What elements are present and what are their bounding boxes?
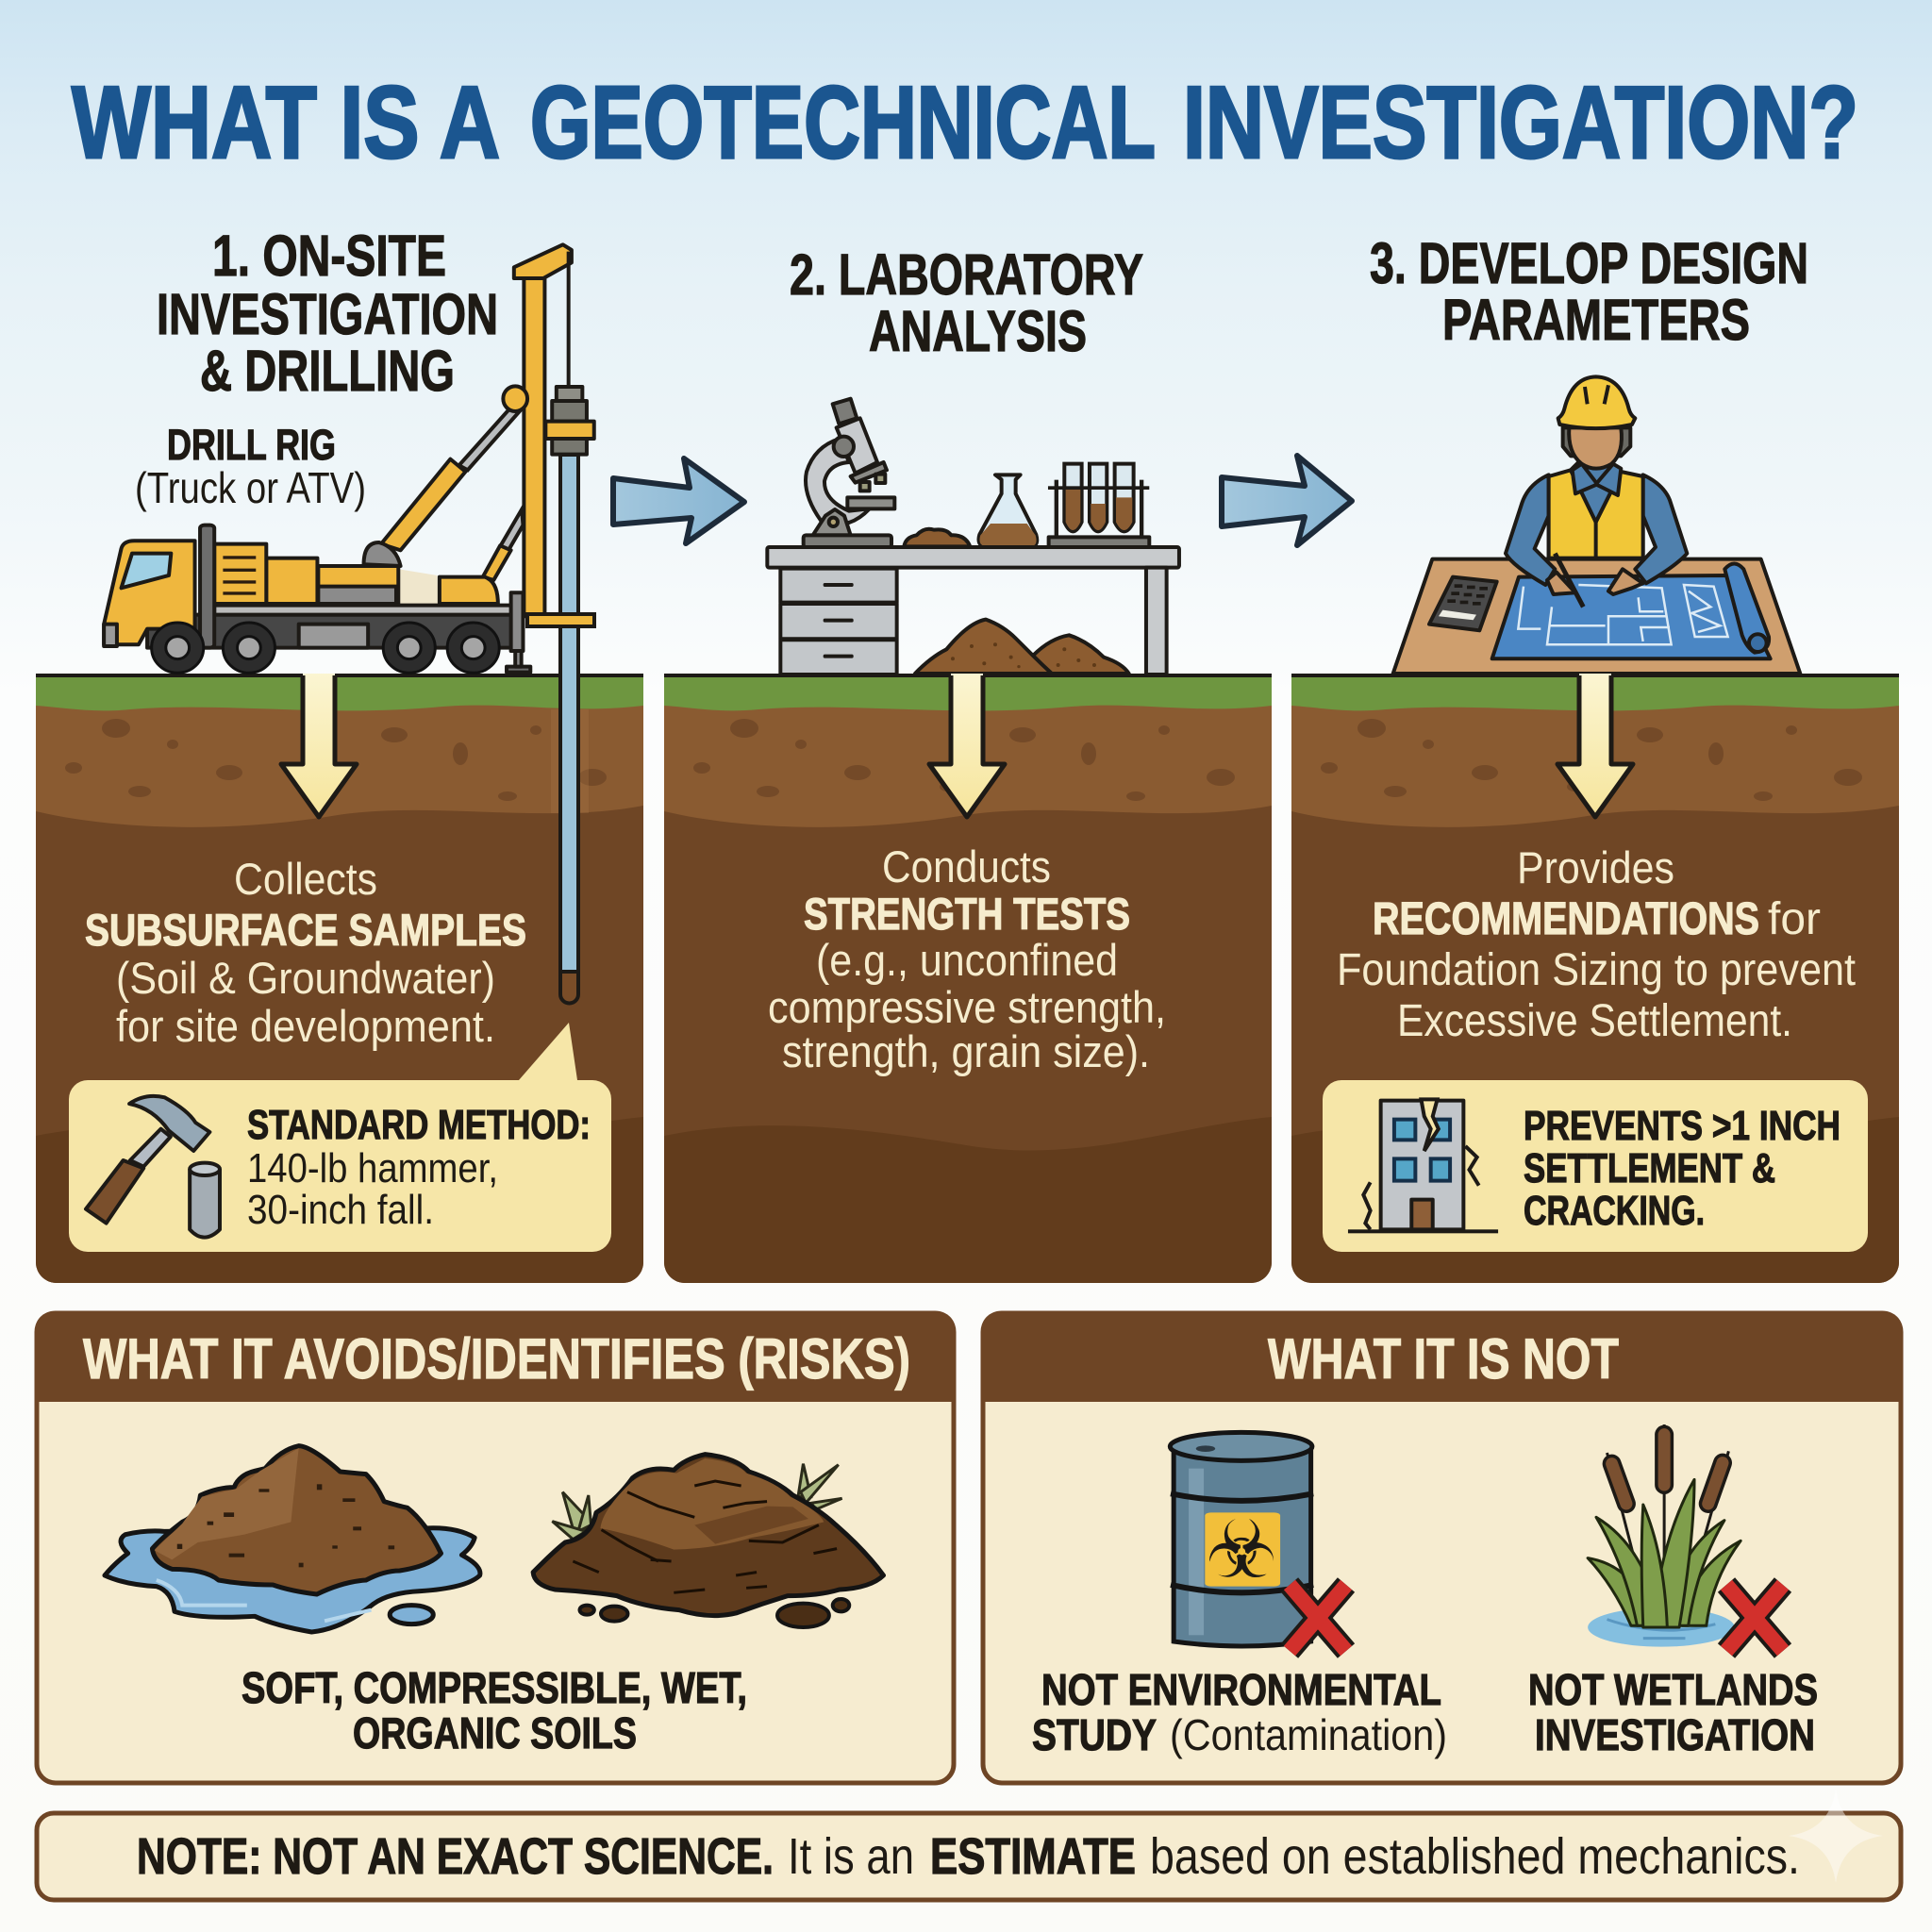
caption: not environmental: (Contamination) [1170,1710,1447,1759]
note bar: NOTE: NOT AN EXACT SCIENCE. [137,1828,774,1885]
panel header: risks [35,1311,956,1402]
icon: red x on barrel [1290,1585,1346,1651]
icon: red x on reeds [1726,1585,1783,1651]
text: step 1 description: (Soil & Groundwater) [116,953,495,1003]
title: GEOTECHNICAL [530,65,1156,180]
title: WHAT IS A [72,65,500,180]
heading: step 1: & DRILLING [200,339,455,403]
arrow: step 1 to step 2 [613,458,744,543]
heading: step 3: 3. DEVELOP DESIGN [1370,231,1808,295]
text: step 2 description: Conducts [882,841,1051,891]
panel: step 3 soil [1291,674,1899,1283]
caption: risks: ORGANIC SOILS [353,1708,637,1757]
caption: not wetlands: INVESTIGATION [1535,1710,1815,1759]
icon: hammer and rod [86,1096,220,1238]
heading: step 3: PARAMETERS [1442,288,1750,352]
text: step 3 description: Foundation Sizing to prevent [1337,945,1856,995]
text: step 1 description: SUBSURFACE SAMPLES [85,905,526,955]
callout: prevents settlement: PREVENTS >1 INCH [1524,1103,1840,1149]
text: step 1 description: Collects [234,854,377,904]
label: drill rig: DRILL RIG [167,421,336,469]
icon: drill rig truck [104,244,594,673]
text: step 3 description: for [1768,894,1821,944]
icon: lab bench with microscope, flask, tubes, soil [767,399,1179,675]
text: step 2 description: compressive strength, [768,982,1166,1032]
caption: not wetlands: NOT WETLANDS [1528,1665,1818,1714]
note bar: ESTIMATE [930,1828,1136,1885]
caption: not environmental [1032,1665,1447,1759]
text: step 1 description: for site development. [116,1001,495,1051]
text: step 2 description: STRENGTH TESTS [804,889,1130,939]
icon: soil piles [105,1446,883,1632]
text: step 2 description [768,841,1166,1076]
callout: standard method [69,1023,611,1252]
watermark sparkle [1789,1789,1883,1883]
panel: what it avoids / identifies [35,1311,956,1783]
note bar: It is an [788,1828,914,1885]
text: step 3 description: Excessive Settlement. [1397,996,1792,1046]
text: step 1 description [85,854,526,1051]
text: step 2 description: (e.g., unconfined [816,935,1118,985]
callout: standard method: 30-inch fall. [247,1187,434,1233]
arrow: step 2 to step 3 [1222,456,1352,545]
callout: prevents settlement [1323,1080,1868,1252]
panel: what it is not [981,1311,1903,1783]
label: drill rig: (Truck or ATV) [135,463,366,512]
callout: prevents settlement: SETTLEMENT & [1524,1145,1775,1191]
arrow: step 3 down [1557,674,1633,817]
text: step 2 description: strength, grain size). [782,1026,1150,1076]
heading: not: WHAT IT IS NOT [1268,1327,1619,1391]
callout: prevents settlement: CRACKING. [1524,1188,1705,1234]
heading: step 2 [790,242,1143,363]
panel: step 1 soil [36,674,643,1283]
heading: step 2: 2. LABORATORY [790,242,1143,307]
note bar: based on established mechanics. [1150,1828,1800,1885]
caption: not environmental: STUDY [1032,1710,1157,1759]
label: drill rig [135,421,366,512]
heading: step 3 [1370,231,1808,352]
icon: wetland reeds [1588,1424,1740,1647]
heading: step 1 [157,224,498,403]
caption: not environmental: NOT ENVIRONMENTAL [1041,1665,1441,1714]
icon: barrel with biohazard [1170,1432,1313,1646]
panel: step 2 soil [664,674,1272,1283]
title [72,65,1858,180]
arrow: step 2 down [929,674,1005,817]
callout: standard method: 140-lb hammer, [247,1145,498,1191]
heading: step 1: INVESTIGATION [157,282,498,346]
icon: cracked building [1348,1099,1498,1233]
heading: step 1: 1. ON-SITE [212,224,446,288]
icon: engineer at desk with blueprint [1393,376,1800,674]
text: step 3 description: Provides [1517,842,1674,892]
arrow: step 1 down [281,674,357,817]
panel header: not [981,1311,1903,1402]
text: step 3 description [1337,842,1856,1046]
callout: standard method: STANDARD METHOD: [247,1102,591,1148]
heading: risks: WHAT IT AVOIDS/IDENTIFIES (RISKS) [83,1327,910,1391]
caption: not wetlands [1528,1665,1818,1759]
caption: risks: SOFT, COMPRESSIBLE, WET, [242,1663,747,1712]
note bar [37,1813,1901,1900]
drill pipe into ground [551,455,589,1003]
heading: step 2: ANALYSIS [869,299,1087,363]
caption: risks [242,1663,747,1757]
clamp [527,614,594,626]
text: step 3 description: RECOMMENDATIONS [1373,894,1759,944]
icon: barrel with biohazard: ☣ [1206,1504,1277,1597]
